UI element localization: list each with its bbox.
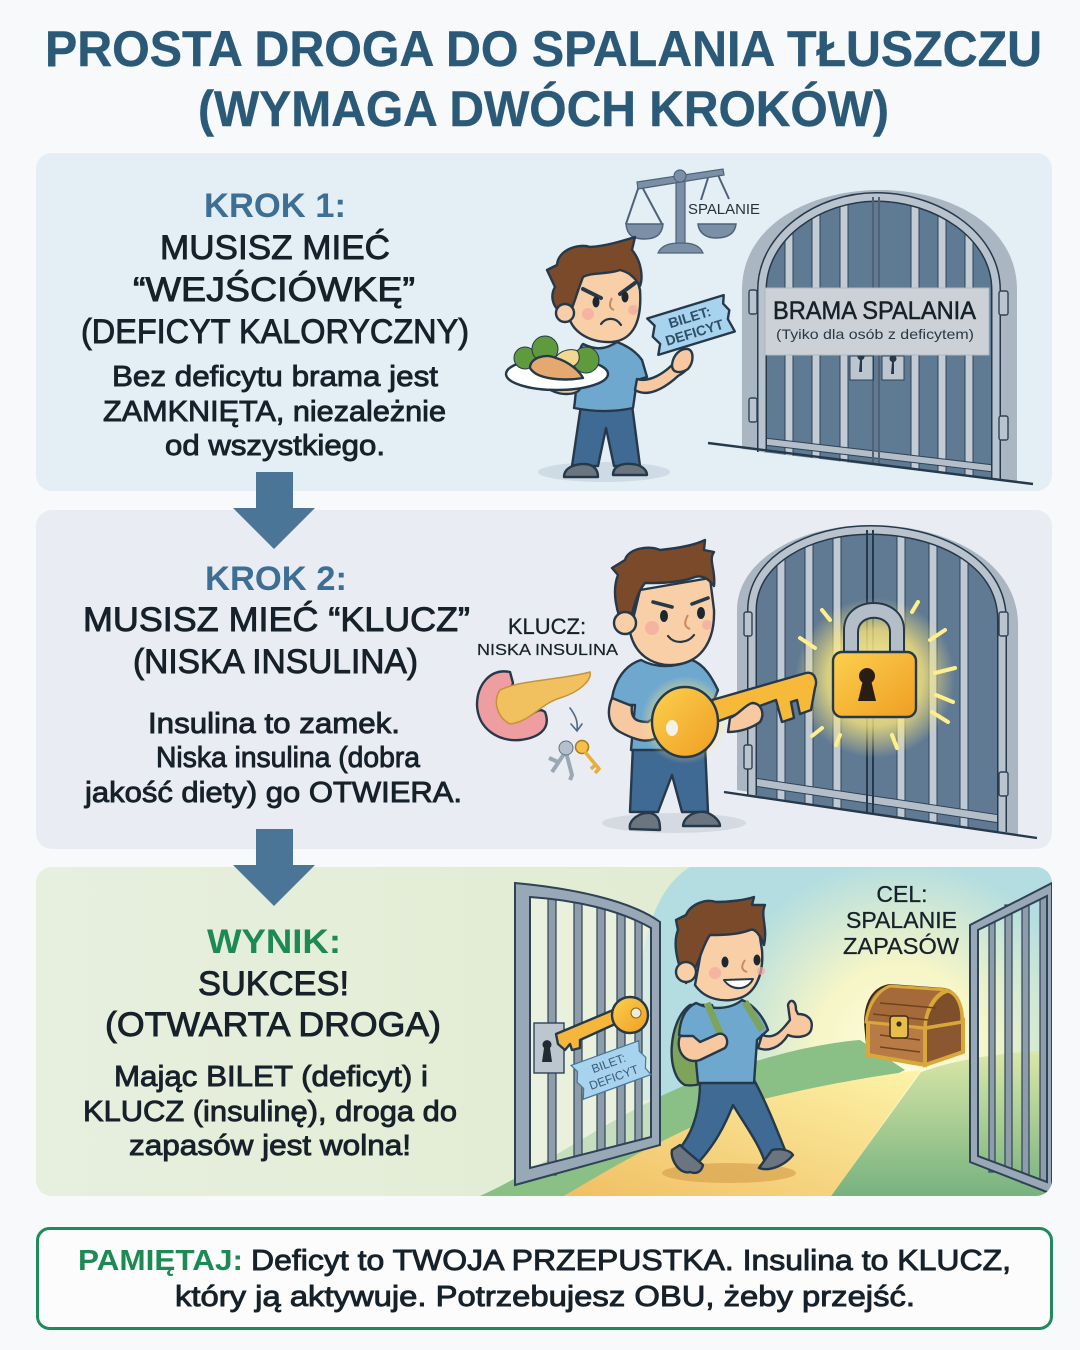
sign: brama spalania: BRAMA SPALANIA	[773, 297, 976, 325]
gate: open left wing	[515, 883, 660, 1185]
icon: golden key	[641, 673, 816, 764]
text: krok 1 description	[103, 361, 446, 462]
ticket: bilet deficyt: BILET:	[666, 303, 713, 331]
callout: pamietaj	[38, 1228, 1052, 1328]
callout: pamietaj: Deficyt to TWOJA PRZEPUSTKA. Insulina to KLUCZ,	[251, 1245, 1011, 1277]
heading: wynik	[105, 923, 441, 1044]
icon: small keys	[549, 740, 600, 780]
heading: krok 2: (NISKA INSULINA)	[133, 643, 418, 681]
sign: brama spalania	[765, 288, 989, 355]
sign: brama spalania: (Tyiko dla osób z deficytem)	[776, 326, 974, 342]
heading: krok 1: (DEFICYT KALORYCZNY)	[81, 313, 469, 351]
icon: pancreas	[477, 671, 590, 740]
callout: pamietaj: który ją aktywuje. Potrzebujesz OBU, żeby przejść.	[175, 1281, 915, 1313]
text: krok 1 description: ZAMKNIĘTA, niezależnie	[103, 396, 446, 428]
label: cel spalanie zapasow: SPALANIE	[846, 907, 957, 933]
heading: krok 2: MUSISZ MIEĆ “KLUCZ”	[83, 601, 470, 639]
label: klucz niska insulina	[477, 614, 618, 659]
character: man with plate and ticket	[506, 237, 736, 482]
icon: glowing padlock	[795, 598, 955, 758]
arrow: pancreas to keys	[570, 708, 582, 731]
label: cel spalanie zapasow: ZAPASÓW	[843, 933, 959, 959]
label: cel spalanie zapasow	[843, 881, 959, 959]
text: wynik description: zapasów jest wolna!	[129, 1130, 411, 1162]
label: klucz niska insulina: KLUCZ:	[508, 614, 586, 639]
text: wynik description	[83, 1061, 457, 1162]
icon: plate with food	[506, 336, 608, 394]
heading: krok 2	[83, 560, 470, 681]
text: krok 1 description: Bez deficytu brama jest	[112, 361, 438, 393]
character: man walking with backpack	[662, 897, 812, 1183]
heading: krok 1: “WEJŚCIÓWKĘ”	[133, 270, 415, 309]
gate: open right wing	[970, 883, 1052, 1194]
heading: wynik: (OTWARTA DROGA)	[105, 1006, 441, 1044]
heading: wynik: SUKCES!	[198, 965, 349, 1003]
title	[45, 21, 1042, 137]
title: PROSTA DROGA DO SPALANIA TŁUSZCZU	[45, 21, 1042, 77]
icon: treasure chest	[865, 985, 963, 1065]
icon: balance scale	[626, 169, 762, 253]
text: wynik description: Mając BILET (deficyt) i	[114, 1061, 428, 1093]
title: (WYMAGA DWÓCH KROKÓW)	[198, 81, 889, 137]
heading: wynik: WYNIK:	[207, 923, 341, 961]
ticket: bilet deficyt on gate: BILET:	[590, 1051, 628, 1076]
heading: krok 1	[81, 187, 469, 351]
text: krok 1 description: od wszystkiego.	[165, 430, 385, 462]
scene background: sky, hills and path	[480, 867, 1052, 1196]
icon: key in lock	[556, 997, 648, 1050]
panel: wynik	[36, 867, 1052, 1196]
ticket: bilet deficyt	[647, 295, 736, 355]
text: krok 2 description: Niska insulina (dobra	[156, 742, 421, 774]
text: krok 2 description: Insulina to zamek.	[148, 708, 400, 740]
ticket: bilet deficyt on gate: DEFICYT	[587, 1062, 641, 1093]
callout: pamietaj: PAMIĘTAJ:	[78, 1245, 243, 1277]
ticket: bilet deficyt on gate	[571, 1040, 652, 1099]
label: klucz niska insulina: NISKA INSULINA	[477, 642, 618, 659]
heading: krok 1: KROK 1:	[204, 187, 346, 225]
arrow: krok 2 to wynik	[233, 829, 315, 906]
heading: krok 1: MUSISZ MIEĆ	[160, 229, 390, 267]
character: man with golden key	[602, 540, 816, 833]
label: cel spalanie zapasow: CEL:	[876, 881, 928, 907]
text: krok 2 description: jakość diety) go OTWIERA.	[84, 777, 462, 809]
gate: locked	[724, 525, 1037, 838]
text: krok 2 description	[84, 708, 462, 809]
ticket: bilet deficyt: DEFICYT	[663, 316, 726, 349]
heading: krok 2: KROK 2:	[205, 560, 347, 598]
text: wynik description: KLUCZ (insulinę), droga do	[83, 1096, 457, 1128]
panel: krok 1	[36, 153, 1052, 491]
icon: balance scale: SPALANIE	[688, 202, 760, 218]
panel: krok 2	[36, 510, 1052, 849]
arrow: krok 1 to krok 2	[233, 472, 315, 549]
gate: brama spalania	[708, 190, 1033, 490]
